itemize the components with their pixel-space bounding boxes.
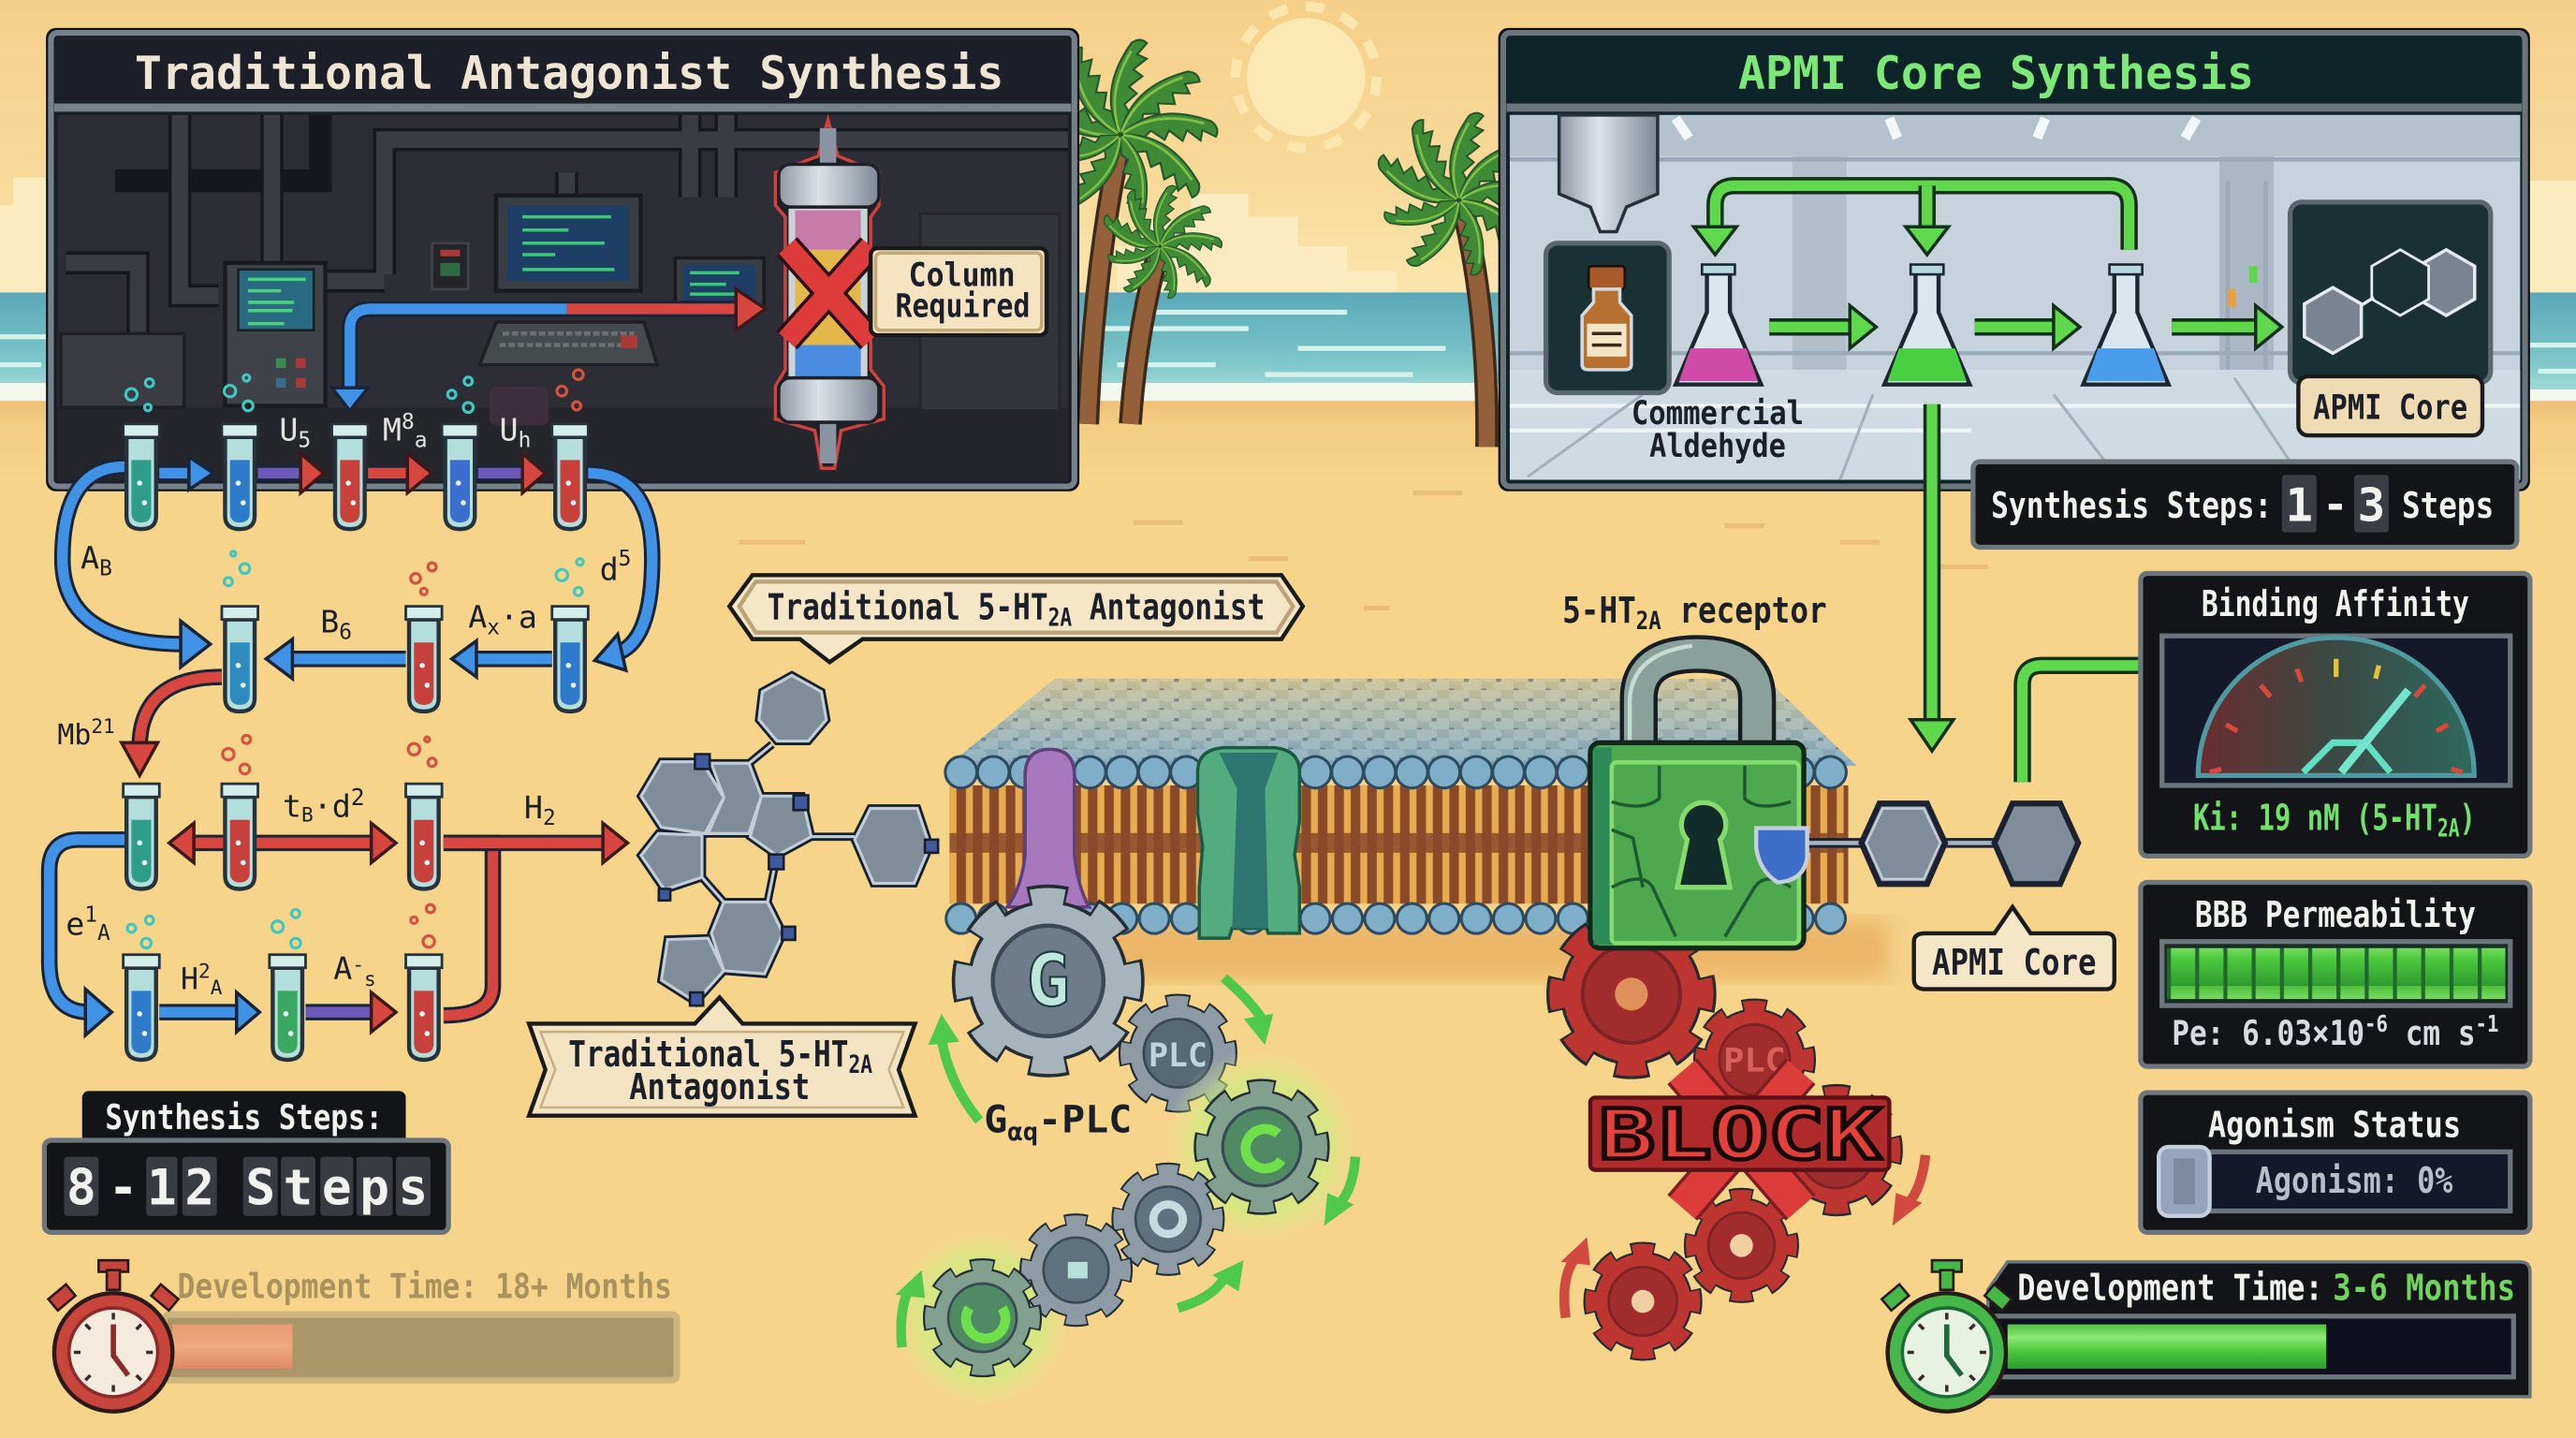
- receptor protein: purple: [1007, 749, 1090, 907]
- arrows: green rotation: [896, 977, 1355, 1347]
- heading: APMI core synthesis: APMI Core Synthesis: [1738, 46, 2254, 100]
- labels: route reagents: a: [415, 428, 427, 452]
- test tubes: [124, 424, 588, 1060]
- icon: G gear: [966, 899, 1130, 1064]
- callout: traditional 5-HT2A antagonist top: [729, 575, 1303, 662]
- panel: synthesis steps APMI: 3: [2358, 477, 2385, 532]
- labels: route reagents: B: [99, 556, 112, 580]
- labels: route reagents: A: [97, 921, 110, 946]
- callout: traditional 5-HT2A antagonist bottom: [529, 997, 915, 1116]
- label: 5-HT2A receptor: 2A: [1636, 608, 1661, 636]
- panel: synthesis steps traditional: 8: [66, 1159, 96, 1216]
- label: commercial aldehyde: Commercial: [1632, 394, 1804, 433]
- labels: route reagents: s: [364, 967, 376, 990]
- heading: traditional antagonist synthesis: Traditional Antagonist Synthesis: [135, 46, 1003, 100]
- panel: synthesis steps traditional: p: [359, 1159, 389, 1216]
- labels: route reagents: 2: [198, 959, 211, 982]
- panel: APMI core result: [2291, 202, 2491, 435]
- icon: nozzle: [1559, 115, 1658, 231]
- labels: route reagents: d: [600, 551, 619, 588]
- panel: BBB permeability: -6: [2364, 1010, 2388, 1037]
- flow: test tube synthesis route: [50, 370, 652, 1060]
- callout: traditional 5-HT2A antagonist top: Antagonist: [1072, 587, 1265, 629]
- icon: G gear: G: [1027, 939, 1070, 1023]
- panel: BBB permeability: BBB Permeability: [2195, 894, 2476, 936]
- panel: agonism status: Agonism Status: [2208, 1105, 2461, 1147]
- panel: BBB permeability: Pe: 6.03×10: [2172, 1013, 2400, 1053]
- callout: traditional 5-HT2A antagonist top: 2A: [1048, 605, 1072, 633]
- labels: route reagents: U: [500, 411, 519, 448]
- progress bar: development time traditional: [165, 1267, 677, 1380]
- chart: traditional antagonist molecule: [641, 675, 938, 1005]
- icon: green stopwatch: [1881, 1260, 2012, 1412]
- gauge: [2198, 638, 2474, 775]
- arrows: red rotation: [1560, 1155, 1925, 1318]
- panel: synthesis steps traditional: 1: [147, 1159, 177, 1216]
- labels: route reagents: t: [283, 787, 301, 824]
- labels: route reagents: 21: [91, 714, 115, 738]
- labels: route reagents: A: [80, 539, 99, 576]
- lab background: [57, 115, 1068, 479]
- panel: agonism status: Agonism: 0%: [2256, 1160, 2452, 1202]
- panel: binding affinity: 2A: [2437, 814, 2460, 843]
- labels: route reagents: h: [519, 428, 531, 452]
- callout: traditional 5-HT2A antagonist bottom: Antagonist: [629, 1066, 810, 1108]
- labels: route reagents: A: [333, 950, 352, 987]
- lab background: [1510, 115, 2520, 479]
- arrows: route pipes: [50, 453, 652, 1035]
- labels: route reagents: A: [468, 598, 487, 635]
- chart: APMI core molecule with key: [1756, 803, 2078, 884]
- chart: APMI flow arrows: [1694, 185, 2282, 348]
- arrow: APMI to membrane: [1910, 404, 1954, 751]
- callout: column required: Required: [896, 287, 1030, 326]
- labels: route reagents: 5: [298, 428, 311, 452]
- icon: block X and label: BLOCK: [1599, 1095, 1881, 1175]
- arrow: binding affinity connector: [2023, 666, 2141, 782]
- chart: active signaling gear cascade: [892, 1049, 1360, 1408]
- label: Gaq-PLC: αq: [1007, 1119, 1038, 1147]
- label: Gaq-PLC: G: [984, 1097, 1007, 1141]
- labels: route reagents: H: [181, 963, 198, 997]
- panel: APMI core synthesis: [1499, 28, 2530, 492]
- panel: synthesis steps traditional: s: [399, 1159, 428, 1216]
- panel: BBB permeability: cm s: [2388, 1013, 2476, 1053]
- labels: route reagents: M: [383, 411, 402, 448]
- callout: traditional 5-HT2A antagonist top: Traditional 5-HT: [768, 587, 1116, 629]
- labels: route reagents: x: [487, 615, 500, 639]
- panel: binding affinity: [2141, 574, 2530, 856]
- panel: agonism status: [2141, 1093, 2530, 1232]
- chart: blocked red gears: PLC: [1723, 1041, 1786, 1079]
- label: commercial aldehyde: [1632, 394, 1804, 465]
- callout: traditional 5-HT2A antagonist bottom: 2A: [848, 1051, 872, 1079]
- panel: binding affinity: Ki: 19 nM (5-HT: [2193, 797, 2520, 839]
- panel: synthesis steps traditional: S: [245, 1159, 275, 1216]
- labels: route reagents: B: [301, 803, 314, 827]
- panel: binding affinity: Binding Affinity: [2202, 583, 2469, 625]
- labels: route reagents: A: [211, 976, 223, 999]
- channel protein: green: [1197, 748, 1299, 938]
- labels: route reagents: e: [66, 906, 84, 943]
- callout: column required: Column: [909, 256, 1016, 294]
- icon: chromatography column crossed out: [775, 120, 884, 468]
- icon: green padlock receptor: [1590, 646, 1804, 948]
- arrow: to column: [332, 289, 766, 411]
- bubbles: [125, 370, 583, 948]
- panel: synthesis steps APMI: [1973, 462, 2517, 547]
- panel: synthesis steps traditional: -: [109, 1159, 138, 1216]
- panel: synthesis steps APMI: Synthesis Steps:: [1991, 485, 2272, 527]
- callout: column required: [871, 248, 1046, 335]
- label: commercial aldehyde: Aldehyde: [1649, 427, 1786, 465]
- labels: route reagents: 2: [543, 806, 556, 830]
- flasks: [1676, 265, 2169, 385]
- progress bar: development time APMI: Development Time:: [2017, 1267, 2323, 1309]
- labels: route reagents: 1: [84, 903, 97, 928]
- labels: route reagents: Mb: [57, 719, 91, 752]
- label: Gaq-PLC: -PLC: [1038, 1097, 1132, 1141]
- panel: BBB permeability: [2141, 882, 2530, 1066]
- labels: route reagents: H: [524, 789, 543, 826]
- panel: APMI core result: APMI Core: [2313, 388, 2467, 428]
- labels: route reagents: 6: [339, 621, 352, 645]
- panel: synthesis steps traditional: [44, 1091, 448, 1232]
- label: 5-HT2A receptor: receptor: [1661, 590, 1827, 632]
- panel: synthesis steps traditional: Synthesis Steps:: [105, 1097, 383, 1137]
- labels: route reagents: 8: [402, 410, 415, 434]
- panel: synthesis steps traditional: t: [284, 1159, 313, 1216]
- progress bar: development time APMI: 3-6 Months: [2333, 1267, 2515, 1309]
- labels: route reagents: [57, 410, 631, 999]
- progress bar: development time APMI: [1988, 1262, 2530, 1397]
- labels: route reagents: 5: [619, 547, 631, 571]
- callout: APMI core label: [1914, 907, 2115, 990]
- panel: traditional antagonist synthesis: [46, 28, 1079, 492]
- palm trees: [1026, 37, 1549, 447]
- panel: BBB permeability: -1: [2476, 1010, 2499, 1037]
- icon: aldehyde bottle: [1546, 243, 1669, 392]
- panel: synthesis steps traditional: e: [322, 1159, 352, 1216]
- chart: cell membrane: [948, 679, 1889, 979]
- icon: block X and label: [1590, 1071, 1889, 1208]
- icon: PLC gear: PLC: [1149, 1036, 1208, 1075]
- panel: synthesis steps APMI: -: [2322, 480, 2349, 530]
- panel: binding affinity: ): [2460, 797, 2476, 839]
- icon: sun: [1236, 7, 1377, 148]
- labels: route reagents: B: [320, 604, 339, 640]
- labels: route reagents: ·d: [314, 787, 351, 824]
- callout: traditional 5-HT2A antagonist bottom: Traditional 5-HT: [568, 1034, 916, 1076]
- labels: route reagents: 2: [351, 784, 365, 811]
- label: 5-HT2A receptor: 5-HT: [1562, 590, 1649, 632]
- panel: synthesis steps APMI: Steps: [2402, 485, 2494, 527]
- icon: PLC gear: [1127, 1003, 1229, 1104]
- labels: route reagents: ·a: [500, 598, 537, 635]
- chart: blocked red gears: [1559, 921, 1893, 1352]
- labels: route reagents: U: [279, 411, 298, 448]
- panel: synthesis steps APMI: 1: [2285, 477, 2313, 532]
- callout: APMI core label: APMI Core: [1932, 942, 2097, 984]
- icon: red stopwatch: [49, 1260, 179, 1412]
- panel: synthesis steps traditional: 2: [184, 1159, 214, 1216]
- labels: route reagents: -: [352, 952, 364, 976]
- progress bar: development time traditional: Development Time: 18+ Months: [178, 1267, 672, 1307]
